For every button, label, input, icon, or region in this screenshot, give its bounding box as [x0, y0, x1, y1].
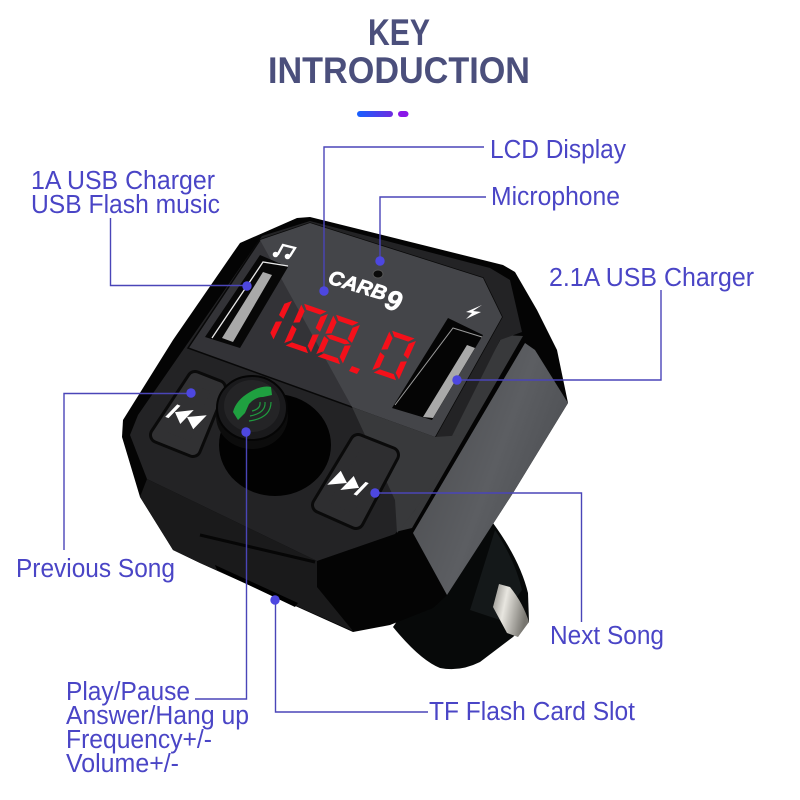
callout: TF flash card slot — [270, 595, 635, 726]
title: INTRODUCTION — [268, 50, 530, 91]
brand logo: 9 — [382, 284, 406, 318]
callout: play and pause: Volume+/- — [66, 750, 179, 778]
callout: previous song — [16, 388, 196, 583]
microphone hole — [373, 270, 383, 278]
callout: play and pause: Play/Pause — [66, 678, 190, 706]
callout: 1A USB charger — [31, 167, 252, 291]
red frequency display 108.0 — [268, 299, 417, 381]
callout: play and pause: Frequency+/- — [66, 726, 212, 754]
title — [268, 12, 530, 91]
device body — [122, 217, 568, 632]
plug barrel — [393, 515, 529, 669]
callout: 2.1A USB charger: 2.1A USB Charger — [549, 264, 754, 292]
callout: 1A USB charger: 1A USB Charger — [31, 167, 215, 195]
last digit 0 — [372, 330, 417, 381]
decimal point — [349, 366, 360, 374]
callout: next song — [370, 488, 664, 650]
lightning bolt icon — [466, 305, 482, 319]
callout: LCD display — [319, 136, 626, 296]
right USB port — [392, 318, 483, 420]
callout: microphone: Microphone — [491, 183, 620, 211]
brand logo: CARB — [326, 267, 389, 305]
brand logo — [323, 266, 406, 318]
side band — [413, 343, 568, 595]
callout: play and pause: Answer/Hang up — [66, 702, 249, 730]
digit 1 — [268, 299, 292, 339]
next button — [320, 442, 391, 521]
callout: TF flash card slot: TF Flash Card Slot — [429, 698, 635, 726]
title: KEY — [368, 12, 430, 53]
callout: next song: Next Song — [550, 622, 664, 650]
panel reflection — [260, 223, 502, 437]
callout: play and pause — [66, 427, 251, 778]
digit 0 — [284, 303, 329, 354]
lower casing — [140, 479, 353, 631]
inner side rim — [395, 335, 523, 532]
digit 8 — [316, 314, 361, 365]
lower groove — [200, 535, 315, 562]
callout: LCD display: LCD Display — [490, 136, 626, 164]
phone icon — [233, 387, 272, 421]
left USB port — [205, 255, 288, 348]
callout: microphone — [375, 183, 620, 266]
callout: previous song: Previous Song — [16, 555, 175, 583]
music note icon — [274, 245, 295, 258]
callout: 2.1A USB charger — [452, 264, 754, 385]
callout: 1A USB charger: USB Flash music — [31, 191, 220, 219]
TF card slot — [215, 565, 298, 607]
lower face reflection — [352, 407, 465, 533]
metal plug tip — [493, 584, 529, 637]
knob — [216, 376, 331, 496]
front rim — [130, 221, 522, 561]
display panel — [188, 223, 502, 437]
car charger device — [122, 217, 568, 669]
previous button — [158, 379, 218, 449]
title accent bar — [357, 111, 408, 117]
